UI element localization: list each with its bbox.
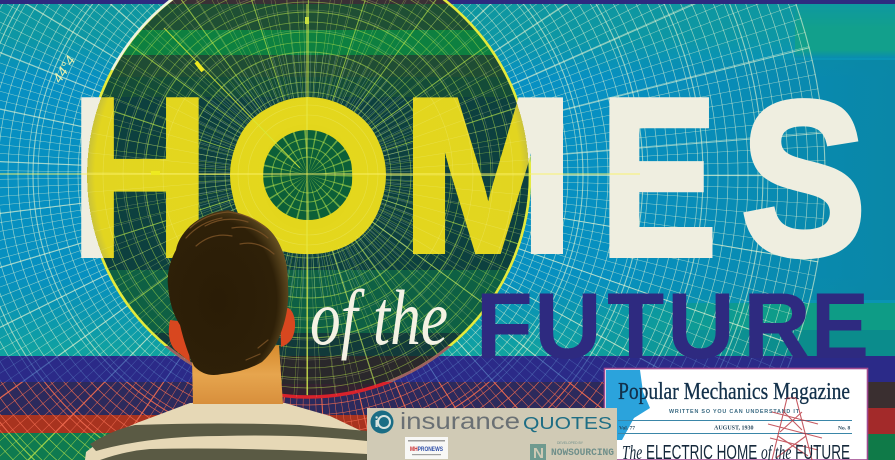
- NowSourcing credit: [530, 441, 614, 460]
- NowSourcing credit: NOWSOURCING: [551, 448, 614, 459]
- overlay lines on title: [0, 0, 640, 395]
- neck: [192, 345, 283, 404]
- icon: iQ badge: [370, 410, 394, 434]
- issue rule lines: AUGUST, 1930: [714, 426, 754, 432]
- issue rule lines: [618, 420, 852, 434]
- title: HOMES: S: [741, 57, 866, 301]
- small MHProNews badge: MHPRONEWS: [410, 447, 443, 453]
- sweater: [85, 403, 372, 460]
- title: HOMES: H: [71, 51, 209, 303]
- ears: [169, 320, 190, 362]
- title: FUTURE: E: [811, 273, 869, 378]
- title: HOMES: M: [402, 54, 574, 298]
- inner disc: [262, 129, 354, 221]
- title: FUTURE: FUTUR: [476, 273, 811, 378]
- person from behind: [85, 210, 372, 460]
- magazine title: Popular Mechanics Magazine: [618, 379, 850, 405]
- magazine cover: Popular Mechanics: [604, 368, 868, 460]
- title: HOMES: E: [600, 51, 717, 303]
- bright fine radials near the ring: [208, 75, 408, 275]
- logo panel: insuranceQuotes: [367, 408, 617, 460]
- magazine tagline: WRITTEN SO YOU CAN UNDERSTAND IT: [669, 409, 800, 415]
- blue splash: [606, 370, 650, 440]
- title: HOMES: O: [222, 56, 394, 299]
- handwritten note: 44°4: [49, 52, 78, 86]
- hair: [168, 210, 288, 375]
- circle outline: [86, 0, 530, 397]
- brand wordmark: [400, 408, 612, 434]
- electric tower: [768, 398, 822, 460]
- issue rule lines: Vol. 77: [619, 426, 635, 432]
- NowSourcing credit: DEVELOPED BY: [557, 441, 584, 445]
- title: HOMES: [71, 51, 866, 303]
- brand wordmark: QUOTES: [523, 413, 612, 433]
- brand wordmark: insurance: [400, 408, 520, 434]
- title: of the: of the: [310, 274, 448, 361]
- issue rule lines: No. 8: [838, 426, 850, 432]
- small MHProNews badge: [405, 437, 448, 459]
- radar circle: [80, 0, 540, 400]
- lower colour bands: [0, 356, 895, 460]
